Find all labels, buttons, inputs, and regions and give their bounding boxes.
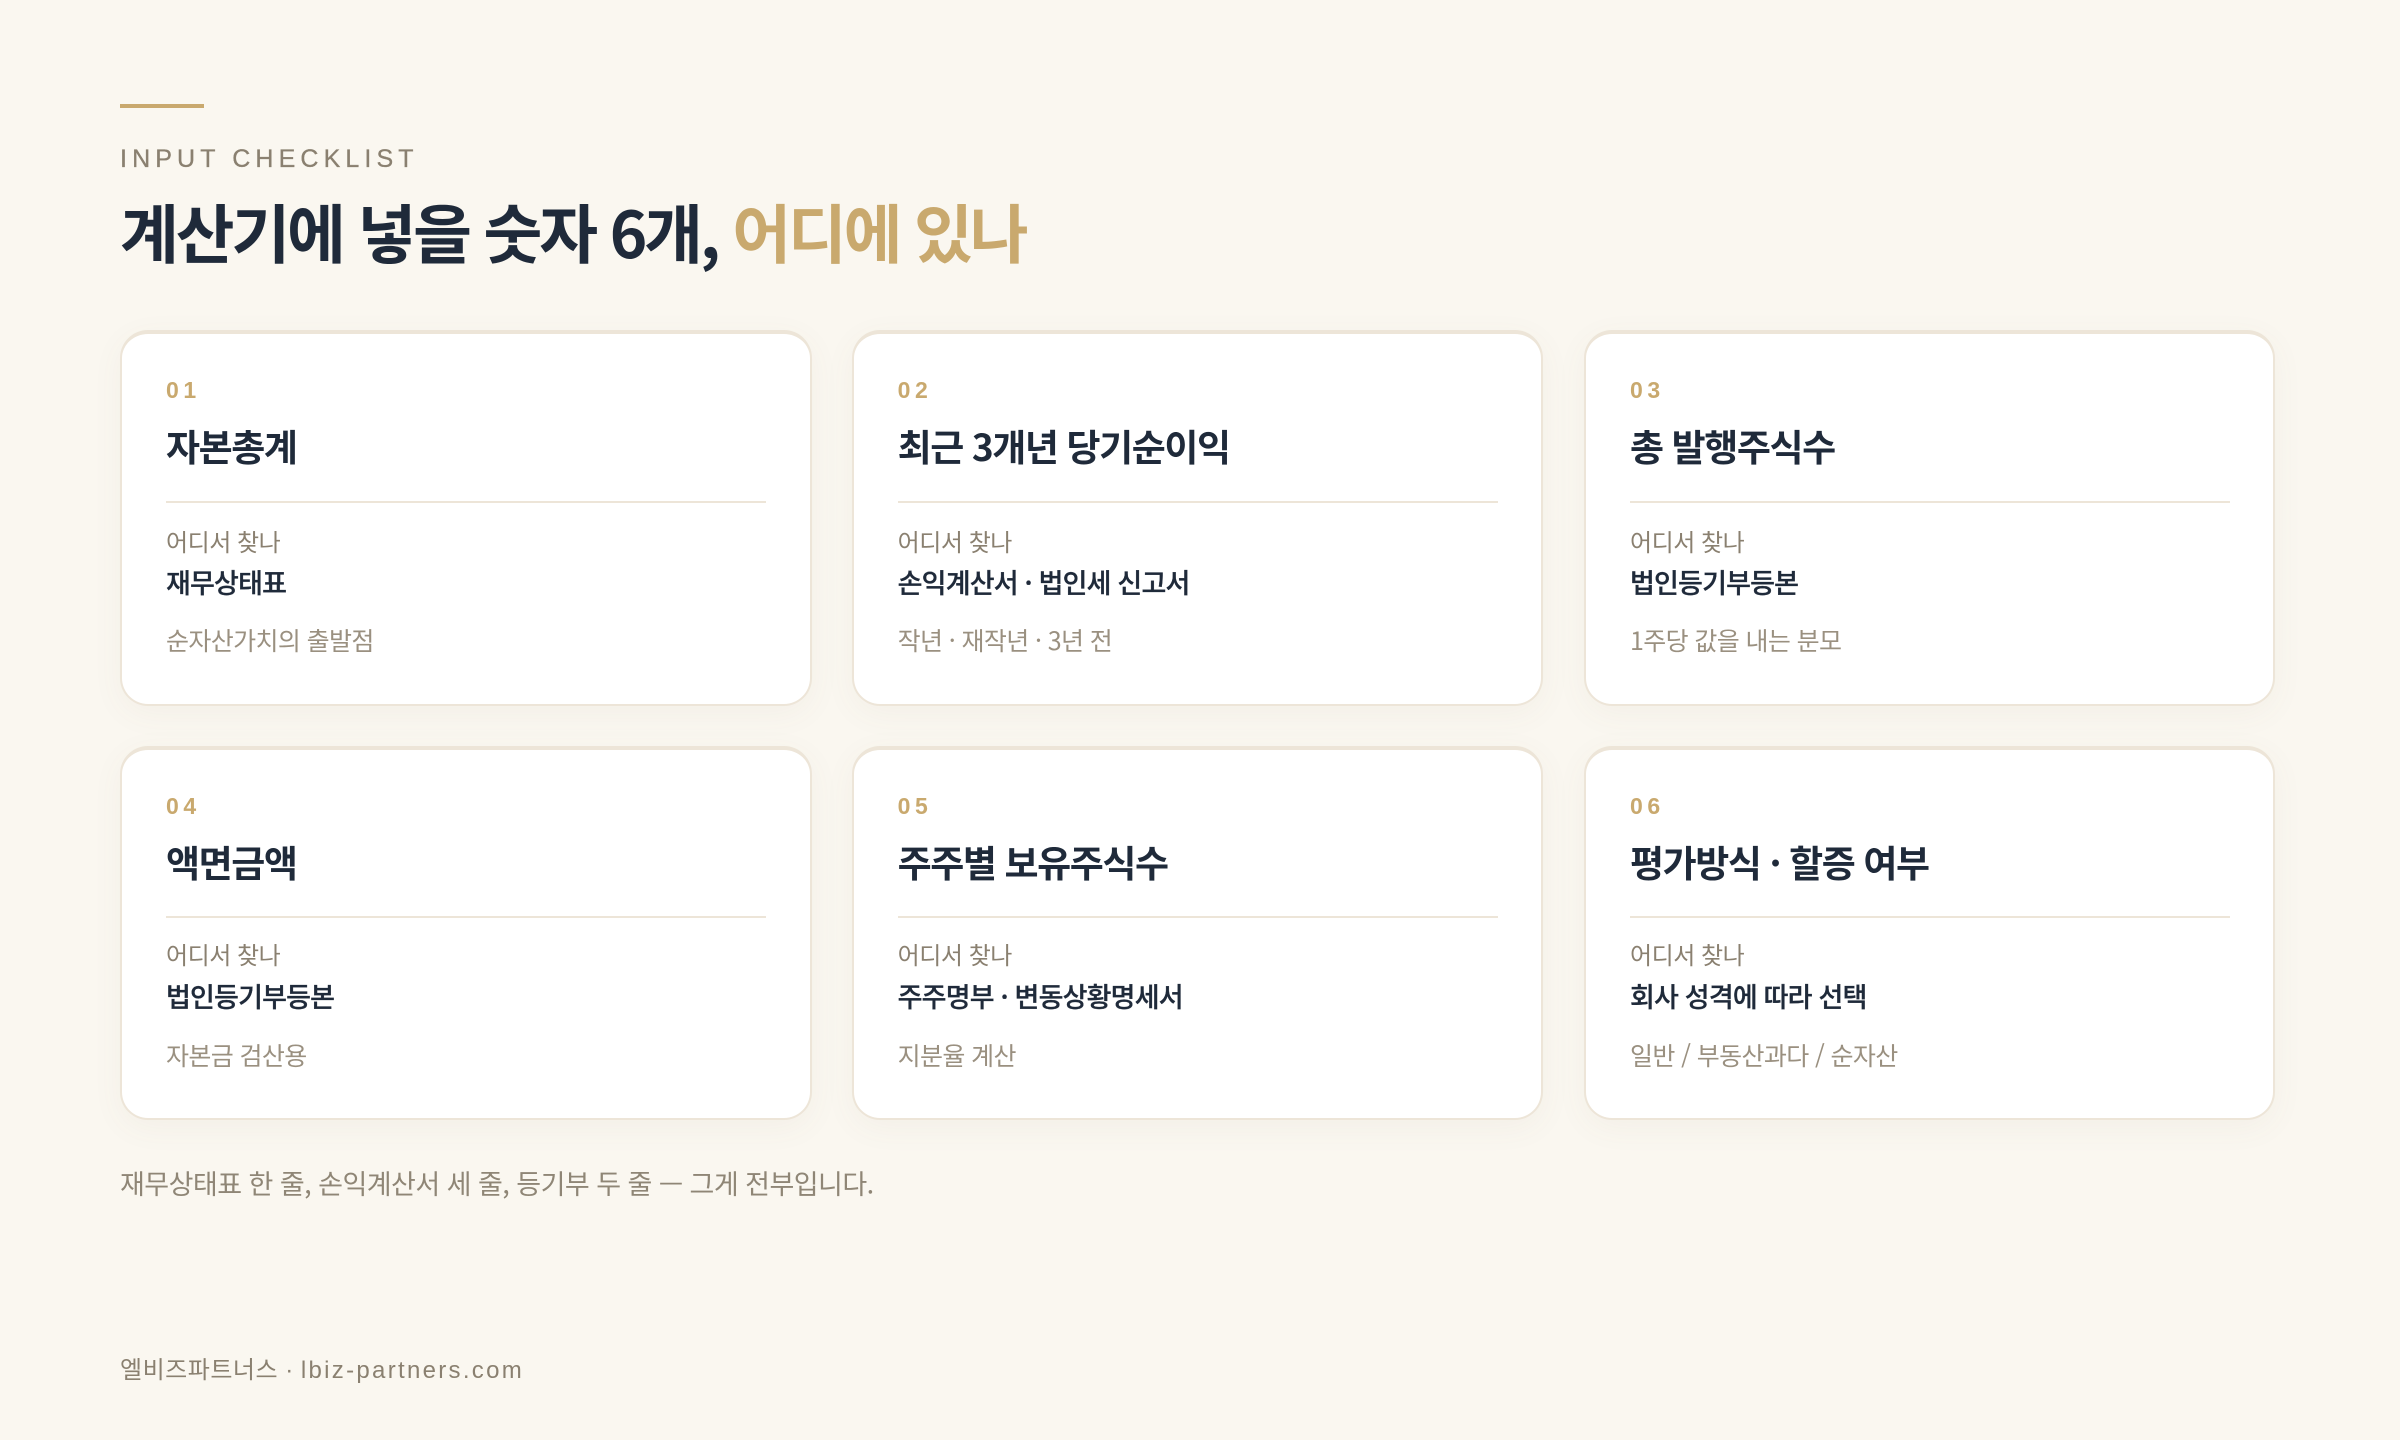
source: 재무상태표 — [166, 562, 286, 601]
label: 어디서 찾나 — [166, 523, 280, 558]
label: 어디서 찾나 — [166, 936, 280, 971]
number: 02 — [898, 377, 932, 403]
card heading: 평가방식 · 할증 여부 — [1630, 834, 1929, 888]
panel: card 05 — [852, 746, 1543, 1120]
source: 회사 성격에 따라 선택 — [1630, 976, 1867, 1015]
card heading: 최근 3개년 당기순이익 — [898, 418, 1230, 472]
panel: card 04 — [120, 746, 812, 1120]
card heading: 총 발행주식수 — [1630, 418, 1835, 472]
note: 순자산가치의 출발점 — [166, 622, 374, 658]
number: 06 — [1630, 793, 1665, 819]
source: 주주명부 · 변동상황명세서 — [898, 976, 1183, 1015]
note: 지분율 계산 — [898, 1037, 1016, 1073]
number: 01 — [166, 377, 201, 403]
footer: 엘비즈파트너스 · lbiz-partners.com — [120, 1357, 524, 1384]
panel: card 02 — [852, 330, 1543, 706]
label: 어디서 찾나 — [1630, 523, 1744, 558]
note: 작년 · 재작년 · 3년 전 — [898, 622, 1112, 658]
title: 계산기에 넣을 숫자 6개, 어디에 있나 — [120, 185, 1025, 277]
accent rule — [120, 104, 204, 108]
card heading: 주주별 보유주식수 — [898, 834, 1168, 888]
source: 손익계산서 · 법인세 신고서 — [898, 562, 1190, 601]
label: 어디서 찾나 — [1630, 936, 1744, 971]
note: 자본금 검산용 — [166, 1037, 307, 1073]
source: 법인등기부등본 — [166, 976, 334, 1015]
summary note: 재무상태표 한 줄, 손익계산서 세 줄, 등기부 두 줄 — 그게 전부입니다. — [120, 1163, 874, 1202]
panel: card 03 — [1584, 330, 2275, 706]
note: 일반 / 부동산과다 / 순자산 — [1630, 1037, 1898, 1073]
panel: card 06 — [1584, 746, 2275, 1120]
label: 어디서 찾나 — [898, 936, 1012, 971]
source: 법인등기부등본 — [1630, 562, 1798, 601]
eyebrow: INPUT CHECKLIST — [120, 145, 419, 173]
label: 어디서 찾나 — [898, 523, 1012, 558]
number: 04 — [166, 793, 201, 819]
card heading: 액면금액 — [166, 834, 297, 888]
number: 03 — [1630, 377, 1665, 403]
number: 05 — [898, 793, 932, 819]
note: 1주당 값을 내는 분모 — [1630, 622, 1841, 658]
card heading: 자본총계 — [166, 418, 297, 472]
panel: card 01 — [120, 330, 812, 706]
